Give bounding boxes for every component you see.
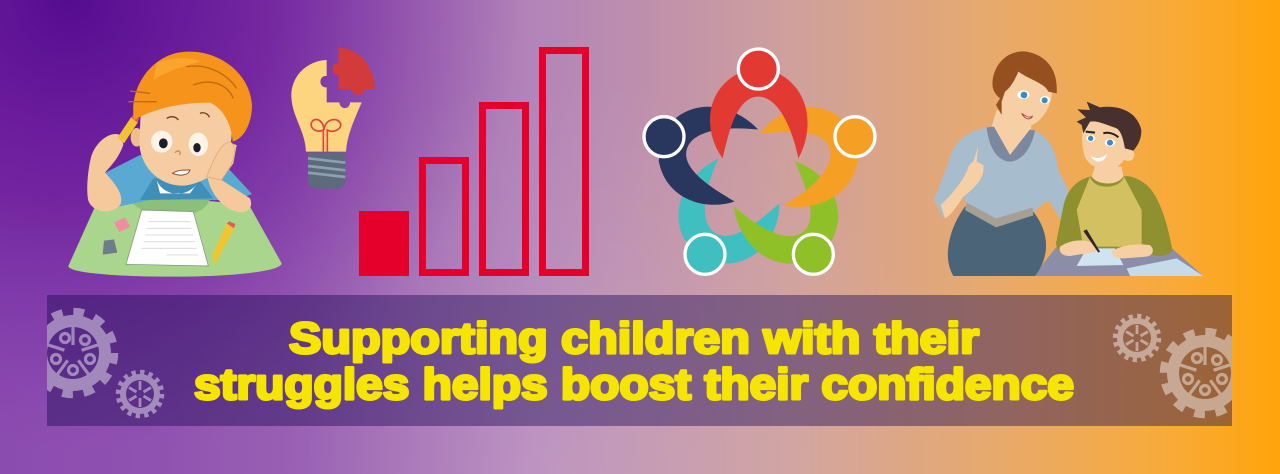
bar 1 filled bbox=[359, 211, 409, 276]
hair bbox=[133, 52, 252, 142]
icon: light bulb with puzzle piece bbox=[291, 48, 375, 189]
banner bbox=[32, 295, 1246, 426]
person: red bbox=[710, 73, 808, 158]
teacher collar bbox=[987, 127, 1035, 162]
pen bbox=[1083, 229, 1100, 253]
gear: large left bbox=[32, 312, 114, 394]
head: orange bbox=[835, 117, 875, 157]
table bbox=[1033, 247, 1203, 276]
sharpener bbox=[103, 239, 117, 255]
student sweater bbox=[1077, 177, 1142, 247]
person: navy bbox=[650, 94, 761, 214]
face: eyes, nose, mouth bbox=[149, 113, 209, 175]
hand on cheek bbox=[207, 142, 234, 180]
icon: circle of five people bbox=[644, 49, 875, 280]
student neck bbox=[1092, 167, 1123, 184]
person: orange bbox=[756, 95, 867, 214]
notebook bbox=[1127, 258, 1203, 276]
head: red bbox=[738, 49, 778, 89]
head: green bbox=[793, 234, 833, 274]
teacher sweater bbox=[934, 127, 1068, 227]
illustration: teacher helping student bbox=[934, 51, 1203, 276]
head bbox=[139, 95, 232, 186]
gears bbox=[32, 312, 1246, 416]
paper bbox=[126, 210, 208, 266]
person: green bbox=[726, 154, 855, 280]
head: teal bbox=[685, 234, 725, 274]
bulb glass bbox=[291, 60, 362, 152]
banner panel bbox=[47, 295, 1232, 426]
eraser bbox=[114, 217, 130, 232]
pencil in hand bbox=[118, 117, 138, 143]
bar 2 outline bbox=[422, 160, 466, 272]
headline: struggles helps boost their confidence bbox=[194, 360, 1074, 409]
bulb base bbox=[308, 153, 345, 189]
bar chart bbox=[359, 50, 586, 276]
student head bbox=[1082, 121, 1131, 170]
ear bbox=[131, 128, 143, 147]
leaning arm bbox=[207, 142, 251, 212]
paper on table bbox=[1077, 248, 1123, 266]
student eyes and smile bbox=[1086, 132, 1118, 162]
bar 3 outline bbox=[482, 106, 526, 272]
teacher eyes and mouth bbox=[1017, 90, 1050, 119]
teacher head bbox=[999, 68, 1052, 128]
bar 4 outline bbox=[542, 50, 586, 272]
gear: large right bbox=[1164, 332, 1246, 414]
person: teal bbox=[661, 154, 790, 280]
illustration: thinking boy at desk bbox=[68, 52, 282, 277]
gear: small left bbox=[118, 372, 162, 416]
shirt bbox=[103, 155, 252, 207]
student sleeves bbox=[1056, 176, 1172, 256]
student hair bbox=[1077, 102, 1141, 151]
teacher neck bbox=[992, 110, 1032, 158]
puzzle piece bbox=[333, 48, 375, 95]
filament bbox=[311, 119, 341, 152]
teacher skirt bbox=[948, 207, 1046, 276]
headline bbox=[194, 314, 1074, 409]
arm holding pencil bbox=[87, 134, 123, 211]
headline: Supporting children with their bbox=[289, 314, 979, 363]
teacher hair bbox=[992, 51, 1057, 115]
teacher belt bbox=[965, 203, 1033, 227]
gear: small right bbox=[1116, 316, 1158, 360]
desk bbox=[68, 200, 282, 277]
head: navy bbox=[644, 117, 684, 157]
teacher forearm and hand bbox=[941, 146, 984, 218]
pencil on desk bbox=[213, 223, 235, 266]
student hands bbox=[1060, 240, 1153, 258]
